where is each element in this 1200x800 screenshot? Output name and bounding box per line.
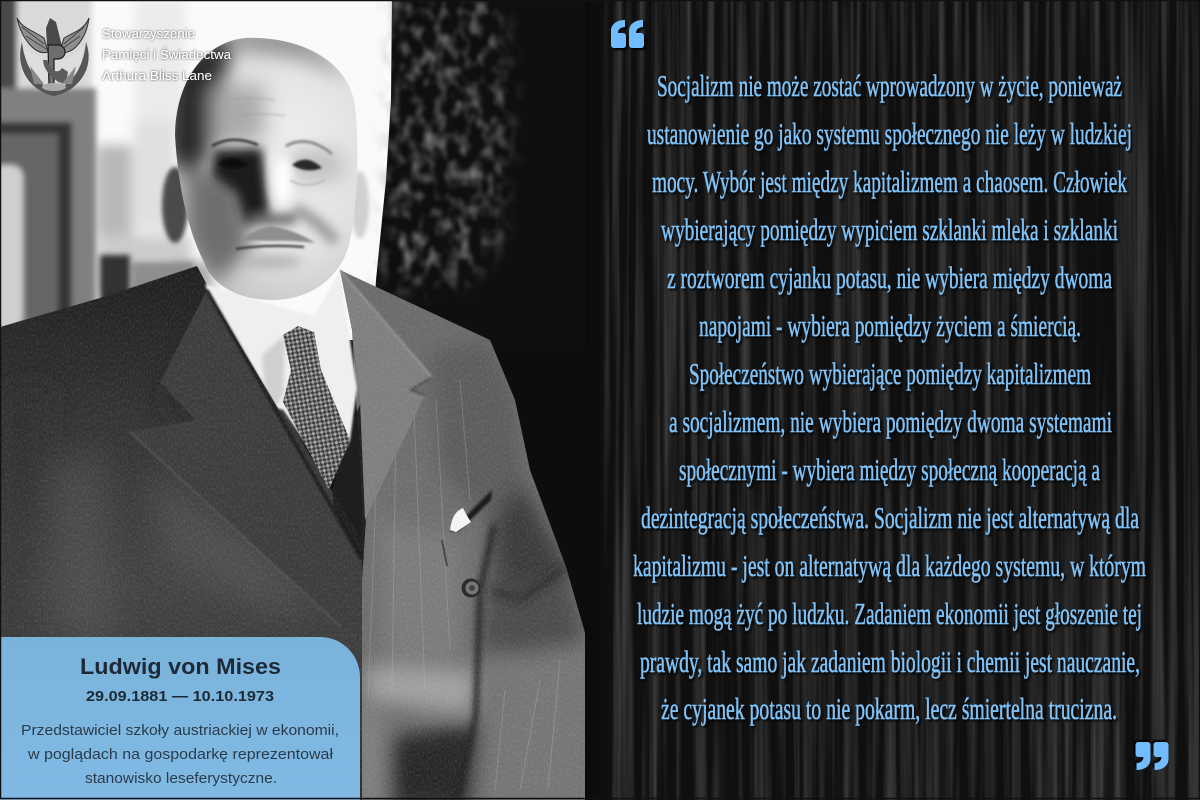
- facial shading and features: [165, 28, 352, 285]
- icon: opening quotation mark: [611, 20, 644, 48]
- face shape: [175, 38, 357, 300]
- icon: closing quotation mark: [1136, 742, 1168, 770]
- panel: quote background: [585, 0, 1200, 800]
- jacket cloth grain: [0, 260, 585, 800]
- left lapel: [130, 290, 362, 640]
- vest: [332, 400, 366, 640]
- shirt collar shading: [261, 336, 286, 406]
- biography description: stanowisko leseferystyczne.: [85, 770, 277, 787]
- association name: Stowarzyszenie: [102, 26, 195, 41]
- biography description: w poglądach na gospodarkę reprezentował: [27, 746, 334, 763]
- jacket: viewer's left side: [0, 266, 365, 800]
- biography description: [21, 722, 339, 787]
- curtain: [376, 1, 522, 300]
- button: [462, 578, 480, 598]
- head: [162, 28, 369, 300]
- icon: association emblem: [17, 18, 89, 96]
- jacket shading and folds: [0, 330, 600, 800]
- photo: portrait of Ludwig von Mises: [0, 0, 600, 800]
- panel: biography: [0, 637, 360, 800]
- jacket: viewer's right side: [340, 270, 585, 800]
- right lapel: [340, 270, 432, 520]
- handkerchief pocket: [442, 490, 492, 566]
- shirt: [205, 272, 357, 480]
- name heading: Ludwig von Mises: [80, 654, 281, 679]
- life dates: 29.09.1881 — 10.10.1973: [86, 688, 274, 705]
- photo background: room and window: [1, 1, 585, 632]
- association name: [102, 26, 232, 83]
- association name: Pamięci i Świadectwa: [102, 47, 232, 62]
- ears: [162, 167, 188, 243]
- quote text: [633, 68, 1146, 726]
- association name: Arthura Bliss Lane: [102, 68, 212, 83]
- tie: [283, 326, 350, 490]
- biography description: Przedstawiciel szkoły austriackiej w ekonomii,: [21, 722, 339, 739]
